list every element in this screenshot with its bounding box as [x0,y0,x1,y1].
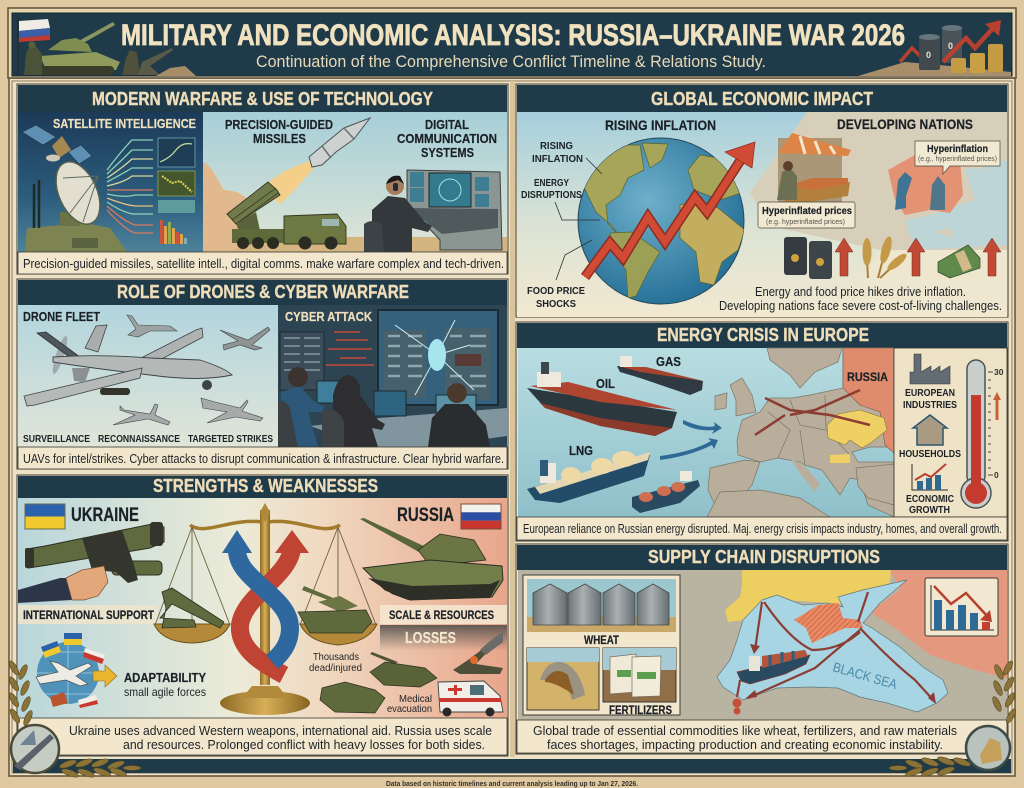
icon: anti-tank launcher held in hand [18,522,164,603]
label: medical evacuation: Medical [399,693,432,705]
label: drone roles: SURVEILLANCE [23,433,90,445]
label: digital communication systems: DIGITAL [425,117,469,132]
arrowhead: blue [222,530,252,553]
label: energy disruptions [521,177,582,201]
icon: satellite dish on vehicle [25,155,127,252]
callout: hyperinflated prices: Hyperinflated prices [762,205,852,217]
label: casualties: Thousands [313,651,359,663]
icon: factory [910,354,950,384]
label: drone roles: TARGETED STRIKES [188,433,273,445]
callout: hyperinflation: Hyperinflation [927,144,988,155]
smoke cloud [203,162,254,250]
icon: cyber operators [278,367,490,447]
label: households: HOUSEHOLDS [899,448,961,460]
icon: oil barrels, coins and rising arrow [858,20,1011,76]
label: rising inflation [532,140,583,165]
heading: supply chain [517,545,1007,570]
heading: global economic [517,85,1007,112]
panel: strengths and weaknesses [17,475,508,756]
label: losses: LOSSES [405,630,456,647]
chart: satellite screens [158,138,195,244]
background: sky gradient [517,112,1007,317]
panel: supply chain disruptions [516,544,1008,754]
region: Russia [843,348,894,453]
label: losses [380,625,507,651]
leader lines [555,158,602,280]
icon: Russian flag [17,17,50,75]
text: economic summary [719,284,1002,313]
caption: supply chain: faces shortages, impacting production and creating economic instability. [547,737,943,752]
heading: supply chain: SUPPLY CHAIN DISRUPTIONS [648,547,880,567]
icon: thermometer: 0 [994,470,999,480]
panel: role of drones and cyber warfare [17,279,508,469]
icon: destroyed tanks [320,632,503,713]
label: Russia: RUSSIA [397,505,454,526]
icon: LNG carrier: LNG [569,443,593,458]
callout: hyperinflation [915,141,1000,174]
label: precision-guided missiles: PRECISION-GUIDED [225,117,333,132]
icon: satellite [22,125,92,164]
icon: wheat with up arrow [862,235,925,278]
heading: strengths: STRENGTHS & WEAKNESSES [153,476,378,496]
map: Black Sea region: BLACK SEA [831,659,899,692]
icon: banknotes with up arrow [938,238,1001,278]
arrows: flow to Europe [660,420,722,460]
arrowhead: red [275,530,309,553]
icon: gas tanker: GAS [656,354,681,369]
icon: laptops [317,381,476,416]
caption: strengths [18,718,507,755]
icon: oil barrels, coins and rising arrow: 0 [926,50,931,60]
caption: strengths: and resources. Prolonged conflict with heavy losses for both sides. [123,737,485,752]
label: international support [18,605,158,624]
sub-panel: precision-guided missiles and digital communication [203,112,507,252]
subtitle: Continuation of the Comprehensive Conflict Timeline & Relations Study. [256,52,766,71]
label: international support: INTERNATIONAL SUPPORT [23,608,155,622]
icon: oil barrels with up arrow [784,237,853,279]
icon: growth chart [912,464,948,490]
icon: oil tanker [527,362,677,436]
label: digital communication systems: COMMUNICATION [397,131,497,146]
panel: energy crisis in Europe [516,322,1008,541]
caption: energy [517,517,1007,540]
icon: oil tanker: OIL [596,376,615,391]
heading: modern warfare [18,85,507,112]
label: drone roles [23,433,273,445]
label: rising inflation: INFLATION [532,153,583,165]
heading: modern warfare: MODERN WARFARE & USE OF TECHNOLOGY [92,89,433,109]
inset: falling trade chart [925,578,998,636]
icon: market stall [777,133,851,205]
heading: drones [18,280,507,305]
panel: modern warfare and use of technology [17,84,508,274]
label: digital communication systems: SYSTEMS [421,145,474,160]
label: European industries: EUROPEAN [905,387,955,399]
icon: oil barrels, coins and rising arrow: 0 [948,41,953,51]
icon: launcher truck [227,182,346,250]
region: Russia [870,570,1007,678]
icon: small drone two [220,327,270,350]
icon: small drone one [127,315,177,337]
icon: main drone [24,325,232,406]
arrow: blue intertwined [237,548,290,662]
icon: LNG carrier [527,443,650,503]
icon: globe [578,138,750,304]
icon: small drone three [113,404,170,425]
arrow: adaptability [93,665,117,687]
label: food price shocks [527,285,585,310]
laurel and medallion: bottom left [7,660,141,779]
label: Ukraine: UKRAINE [71,505,139,526]
label: medical evacuation [387,693,432,715]
icon: Russian flag [461,504,501,529]
region: Black Sea [717,580,948,712]
map: Black Sea region [518,570,1007,720]
laurel and medallion: bottom right [889,660,1018,778]
callout: hyperinflation: (e.g., hyperinflated prices) [918,154,997,163]
icon: Ukraine flag [25,504,65,529]
arrowhead: rising price [725,142,755,168]
sub-panel: drone fleet [18,305,278,447]
region: Ukraine [725,570,891,622]
icon: control console [407,170,502,250]
icon: house [913,415,947,445]
inset: wheat and fertilizers [523,575,680,717]
label: scale and resources: SCALE & RESOURCES [389,608,494,622]
pipelines [755,390,870,435]
label: adaptability: small agile forces [124,685,206,699]
icon: main battle tank [360,518,503,600]
heading: energy crisis [517,323,1007,348]
icon: small LNG carrier [632,471,700,513]
label: fertilizers: FERTILIZERS [609,705,672,717]
label: adaptability: ADAPTABILITY [124,670,206,685]
label: economic growth [906,493,954,516]
image: grain silos [527,579,676,632]
label: energy disruptions: DISRUPTIONS [521,189,582,201]
arrowheads on routes [745,644,936,704]
caption: supply chain: Global trade of essential commodities like wheat, fertilizers, and raw materials [533,723,957,738]
heading: strengths [18,476,507,498]
map: Europe: RUSSIA [847,370,888,384]
sub-panel: cyber attack [278,305,507,447]
label: rising inflation heading: RISING INFLATION [605,117,716,133]
label: scale and resources [380,605,507,624]
region: Crimea [794,603,863,643]
illustration background [18,498,507,718]
arrow: rising price line highlight [585,158,742,277]
map: Europe [518,348,894,517]
arrows: shipping routes [737,592,935,702]
icon: operator [364,176,432,252]
region: Romania [830,454,850,463]
label: European industries [903,387,957,411]
red alert code [326,332,374,365]
icon: balance scale [154,503,377,715]
label: food price shocks: FOOD PRICE [527,285,585,297]
label: energy disruptions: ENERGY [534,177,569,189]
missile exhaust flame [262,160,316,204]
icon: ambulance [438,681,503,716]
caption: supply chain [517,720,1007,753]
arrow: rising price line [585,158,742,277]
panel: global economic impact [516,84,1008,317]
caption: modern warfare: Precision-guided missiles, satellite intell., digital comms. make warfare complex and tech-driven. [23,256,504,271]
map: developing nations [750,112,1007,300]
label: food price shocks: SHOCKS [536,298,576,310]
label: digital communication systems [397,117,497,160]
label: developing nations heading: DEVELOPING NATIONS [837,116,973,132]
callout: hyperinflated prices: (e.g. hyperinflated prices) [766,217,845,226]
icon: thermometer: 30 [994,367,1004,377]
label: casualties [309,651,362,674]
arrow: red intertwined [240,546,292,675]
caption: modern warfare [18,252,507,274]
icon: launcher on left pan [160,588,224,628]
heading: drones: ROLE OF DRONES & CYBER WARFARE [117,282,409,302]
icon: tank and soldiers [24,22,196,76]
caption: strengths: Ukraine uses advanced Western weapons, international aid. Russia uses scale [69,723,492,738]
sub-panel: satellite intelligence [18,112,203,252]
label: drone roles: RECONNAISSANCE [98,433,180,445]
title banner [8,8,1016,78]
icon: thermometer [961,360,1004,508]
footer note: Data based on historic timelines and current analysis leading up to Jan 27, 2026. [386,779,638,788]
caption: drones: UAVs for intel/strikes. Cyber attacks to disrupt communication & infrastructure. Clear hybrid warfare. [23,451,504,466]
icon: small drone four [201,398,263,423]
label: casualties: dead/injured [309,662,362,674]
sub-panel: cyber attack: CYBER ATTACK [285,309,373,324]
image: damaged grain store [527,648,599,710]
image: fertilizer sacks [603,648,676,702]
server racks left [280,332,324,390]
icon: container ship [737,650,810,684]
heading: energy crisis: ENERGY CRISIS IN EUROPE [657,325,869,345]
label: precision-guided missiles: MISSILES [253,131,306,146]
label: wheat: WHEAT [584,635,619,647]
label: European industries: INDUSTRIES [903,399,957,411]
callout: hyperinflated prices [758,202,855,228]
icon: globe with flags and aircraft [36,633,105,708]
heading: global economic: GLOBAL ECONOMIC IMPACT [651,89,873,109]
sub-panel: satellite intelligence: SATELLITE INTELLIGENCE [53,116,196,131]
region: Ukraine [827,410,887,448]
text: economic summary: Energy and food price hikes drive inflation. [755,284,966,299]
icon: missile [309,118,370,167]
icon: gas tanker [617,354,703,395]
sidebar: impacted sectors [894,348,1007,517]
label: economic growth: GROWTH [909,504,950,516]
label: economic growth: ECONOMIC [906,493,954,505]
label: medical evacuation: evacuation [387,703,432,715]
caption: drones [18,447,507,469]
icon: tank on right pan [298,586,372,633]
desk [310,408,507,447]
large screen with shattered glass [378,310,498,405]
decorative signal data lines [107,140,153,233]
bottom band [13,759,1011,773]
icon: figures in need [895,172,945,210]
label: precision-guided missiles [225,117,333,146]
icon: port markers [732,698,742,714]
sub-panel: drone fleet: DRONE FLEET [23,309,100,324]
label: adaptability [124,670,206,699]
label: rising inflation: RISING [540,140,573,152]
